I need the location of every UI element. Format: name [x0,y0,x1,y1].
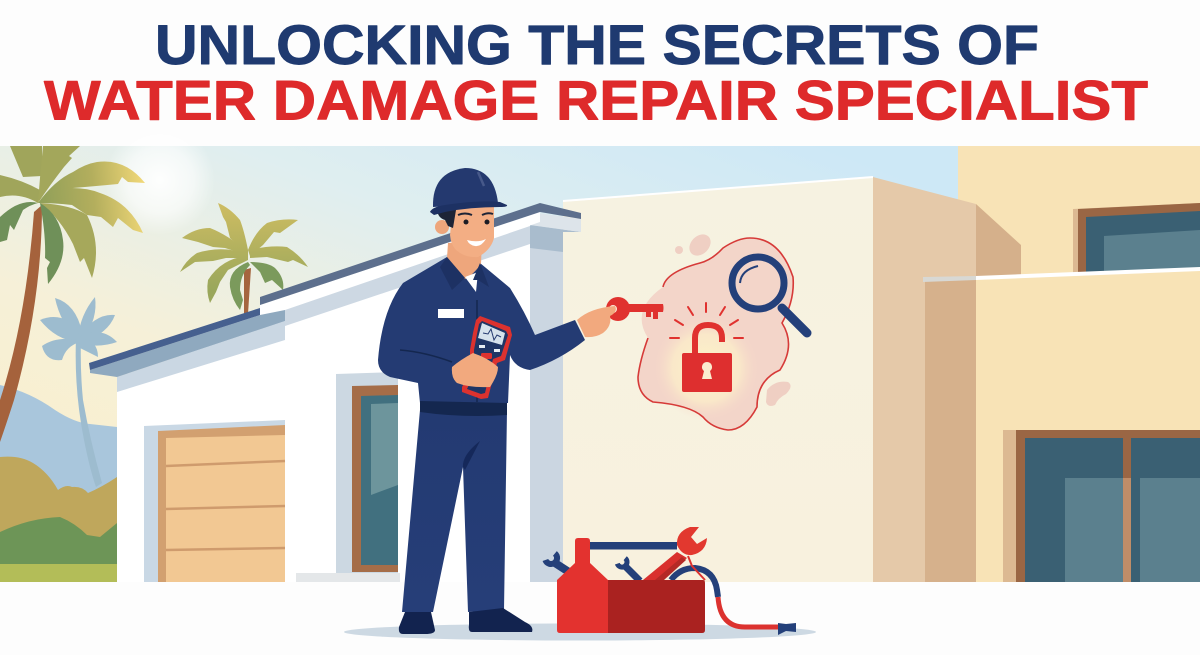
back building [958,146,1200,286]
magnifying glass [732,257,807,333]
trousers [402,410,507,612]
blue background palm [40,297,117,487]
hand holding meter [452,353,498,387]
upper window [1073,203,1200,275]
hand holding key [577,306,616,337]
beige wall and side walls [563,176,1021,582]
light rays [670,303,743,338]
title line 1: UNLOCKING THE SECRETS OF [155,14,1039,76]
jacket fold lines [400,300,477,402]
title line 2: WATER DAMAGE REPAIR SPECIALIST [44,70,1148,132]
head [435,203,494,257]
toolbox [545,527,796,635]
name badge [438,309,464,318]
sky [0,125,970,582]
navy wrench centre [617,558,640,581]
red wrench [643,527,707,580]
ground shadow [344,624,816,640]
jacket torso and arms [378,257,585,403]
stain outline [638,238,793,430]
neck [447,240,482,279]
front door [296,372,400,582]
large palm tree [0,146,145,442]
stain blob [638,238,793,430]
toolbox body [608,580,705,633]
trouser shadow [463,441,480,470]
belt [420,401,507,416]
hard hat [430,168,507,215]
lower window [1003,430,1200,582]
collar [440,257,489,290]
title [44,14,1148,132]
upper roof [260,203,581,326]
small droplets [675,230,791,406]
white house [89,203,581,582]
hose [671,556,778,627]
front building [923,267,1200,582]
mountain and bushes [0,385,117,582]
hose nozzle [778,623,796,635]
navy wrench left [545,553,572,574]
toolbox handle [590,542,677,550]
left shoe [399,612,435,634]
small palm tree [180,203,308,314]
pillar [530,212,581,582]
stain glow [654,316,758,420]
white undershirt [465,272,478,292]
right shoe [469,608,532,632]
unlocked padlock [682,325,732,392]
red water stain with lock, key and magnifier [606,230,807,430]
moisture meter [462,316,512,399]
key [606,297,664,321]
lower roof [89,308,285,392]
garage door [144,420,285,582]
technician [378,168,616,634]
